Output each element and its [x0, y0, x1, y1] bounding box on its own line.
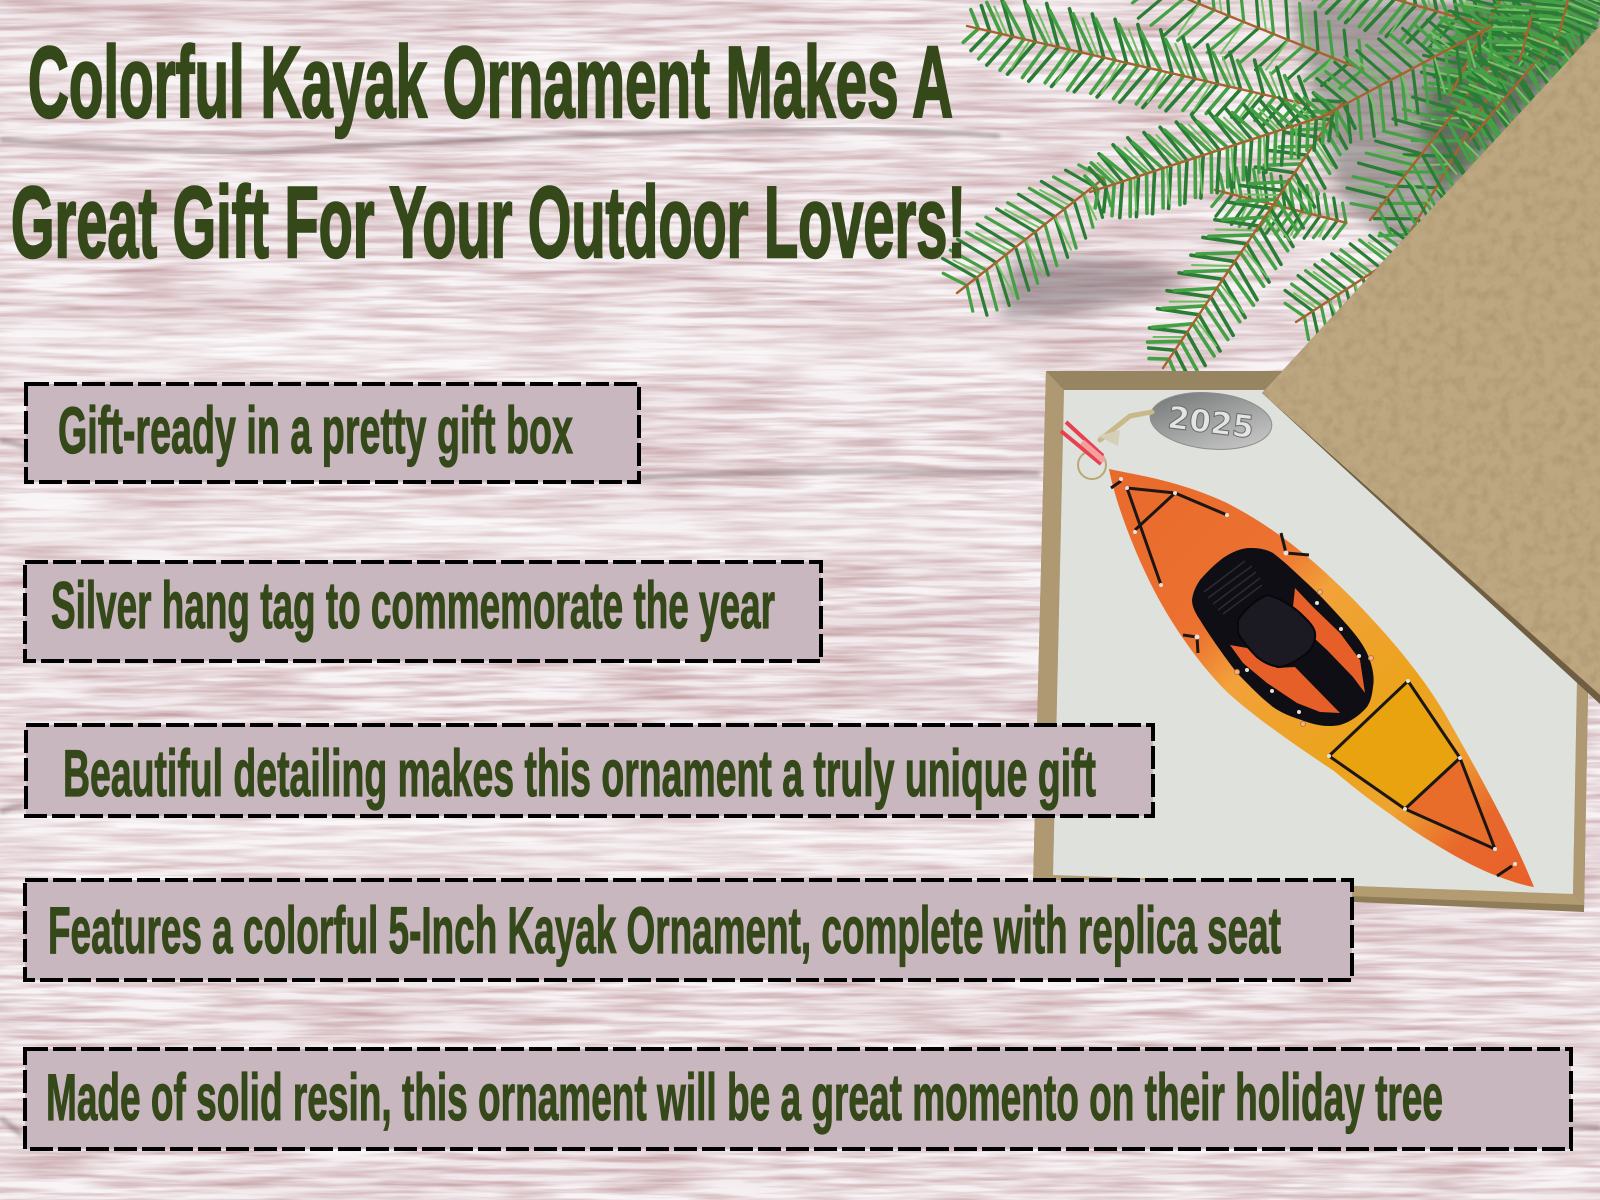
kayak hull — [1109, 469, 1534, 887]
cockpit interior — [1230, 588, 1365, 713]
title — [11, 27, 966, 279]
feature box: detailing — [26, 725, 1153, 816]
feature box: gift box: Gift-ready in a pretty gift box — [58, 393, 573, 467]
deck fittings — [1119, 477, 1517, 866]
silver hang tag: 2025 — [1166, 400, 1256, 446]
pine branches — [931, 0, 1600, 390]
seat — [1238, 595, 1315, 667]
cockpit — [1192, 548, 1374, 726]
feature box: replica seat — [25, 880, 1352, 980]
feature box: silver tag — [25, 562, 821, 661]
box lid — [1262, 26, 1600, 704]
gift box base — [1033, 371, 1588, 912]
feature box: gift box — [26, 384, 639, 482]
silver hang tag — [1061, 388, 1274, 479]
feature box: silver tag: Silver hang tag to commemorate the year — [51, 568, 775, 642]
pine branch shadow — [1000, 0, 1600, 318]
kayak ornament — [1109, 469, 1534, 887]
tissue paper liner — [1053, 390, 1577, 894]
rear hatch and tail — [1329, 681, 1495, 849]
deck bungee lines — [1111, 481, 1512, 876]
